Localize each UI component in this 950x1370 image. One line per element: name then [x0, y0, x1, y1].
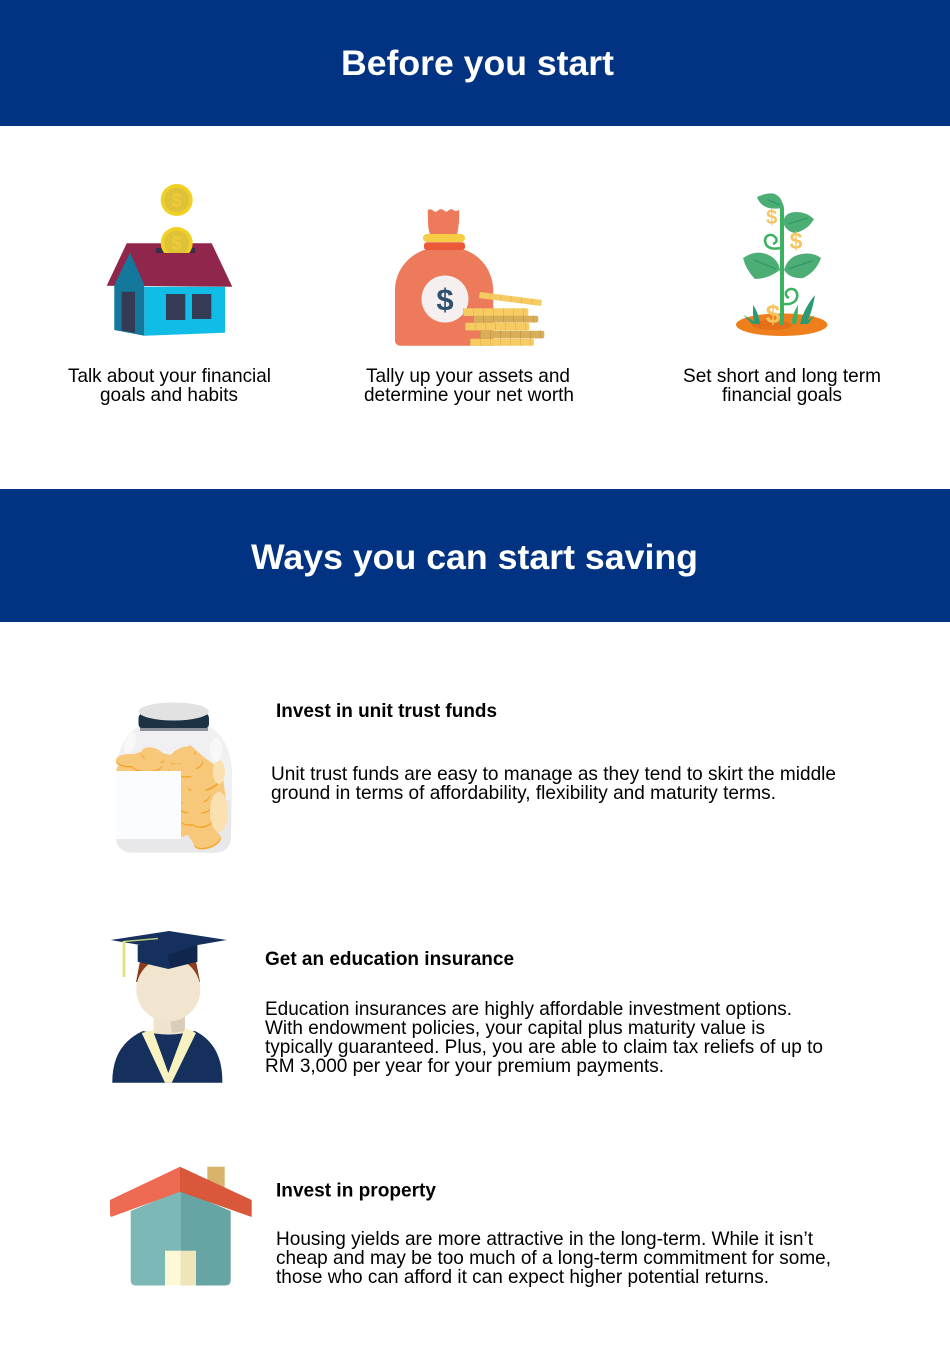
caption: tally assets: determine your net worth	[364, 384, 574, 406]
caption: set goals: Set short and long term	[683, 365, 881, 387]
item: education insurance: RM 3,000 per year for your premium payments.	[265, 1055, 664, 1077]
item: education insurance: Get an education insurance	[265, 949, 514, 970]
caption: tally assets	[364, 365, 574, 406]
icon: property house	[110, 1167, 252, 1286]
item: unit trust funds	[271, 701, 836, 804]
item: unit trust funds: Unit trust funds are easy to manage as they tend to skirt the middle	[271, 763, 836, 785]
icon: money plant: $	[766, 299, 781, 329]
item: education insurance	[265, 949, 823, 1077]
icon: money bag and coin stacks	[395, 209, 544, 346]
caption: set goals: financial goals	[722, 384, 842, 406]
icon: money bag and coin stacks: $	[436, 282, 454, 317]
item: education insurance: Education insurances are highly affordable investment options.	[265, 998, 792, 1020]
header: ways to save: Ways you can start saving	[251, 538, 698, 577]
item: unit trust funds: Invest in unit trust funds	[276, 701, 497, 722]
caption: talk about goals: Talk about your financial	[68, 365, 271, 387]
item: property: those who can afford it can expect higher potential returns.	[276, 1266, 769, 1288]
header: before you start: Before you start	[341, 44, 614, 83]
item: property: cheap and may be too much of a long-term commitment for some,	[276, 1247, 831, 1269]
item: property: Housing yields are more attractive in the long-term. While it isn’t	[276, 1228, 814, 1250]
caption: set goals	[683, 365, 881, 406]
item: property	[276, 1180, 831, 1288]
caption: talk about goals: goals and habits	[100, 384, 238, 406]
icon: money plant	[736, 193, 827, 336]
header: ways to save	[0, 489, 950, 622]
icon: money plant: $	[766, 207, 777, 229]
icon: piggy-bank house with coins: $	[172, 190, 182, 210]
icon: money plant: $	[790, 228, 803, 254]
icon: piggy-bank house with coins: $	[172, 234, 182, 254]
item: education insurance: typically guaranteed. Plus, you are able to claim tax reliefs of up to	[265, 1036, 823, 1058]
icon: coin jar	[116, 702, 232, 853]
item: education insurance: With endowment policies, your capital plus maturity value is	[265, 1017, 765, 1039]
item: unit trust funds: ground in terms of affordability, flexibility and maturity terms.	[271, 782, 776, 804]
caption: tally assets: Tally up your assets and	[366, 365, 570, 387]
caption: talk about goals	[68, 365, 271, 406]
icon: piggy-bank house with coins	[107, 184, 232, 336]
icon: graduate	[111, 931, 227, 1083]
header: before you start	[0, 0, 950, 126]
item: property: Invest in property	[276, 1180, 436, 1202]
